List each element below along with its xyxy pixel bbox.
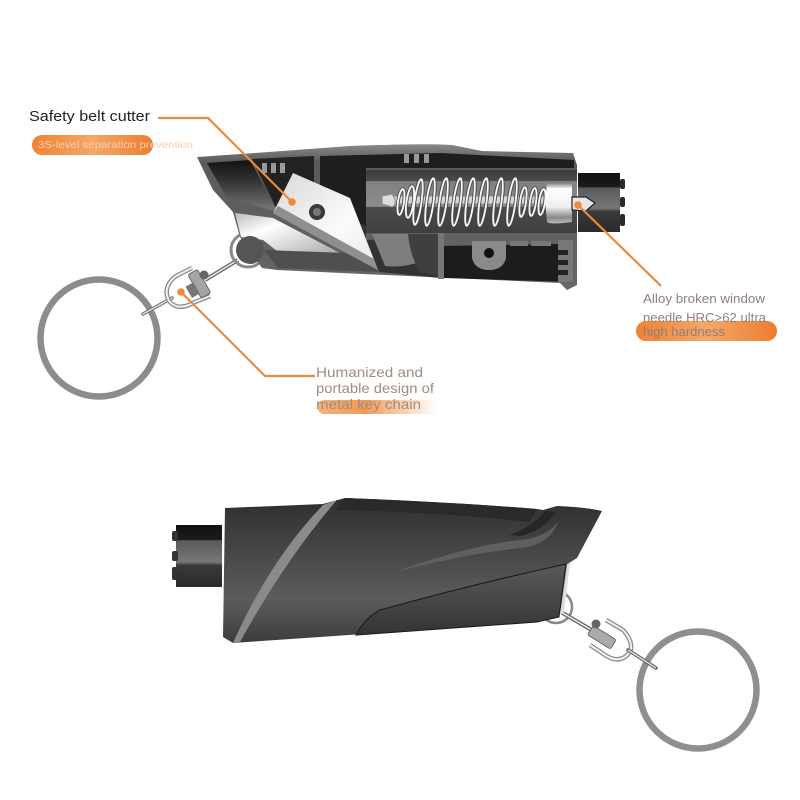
key chain caption: metal key chain <box>316 396 421 412</box>
leader line: window needle <box>574 201 661 286</box>
spring and striker pin <box>382 178 560 226</box>
chrome collar <box>545 183 572 224</box>
top sheen <box>336 498 537 522</box>
orange pill: separation prevention <box>32 135 193 155</box>
top device: cutaway view <box>40 144 625 396</box>
needle caption: needle HRC>62 ultra <box>643 311 766 325</box>
key chain caption: Humanized and <box>316 364 423 380</box>
key chain swivel link <box>143 260 238 314</box>
orange pill: separation prevention: 3S-level separation prevention <box>38 139 193 151</box>
side crease highlight <box>395 522 558 572</box>
swirl dark band <box>408 234 438 276</box>
lower panel <box>356 564 566 635</box>
highlight stripe <box>233 500 337 643</box>
text block: window needle <box>636 292 777 341</box>
title label: safety belt cutter: Safety belt cutter <box>29 108 150 125</box>
needle caption: high hardness <box>643 325 725 339</box>
leader line: belt cutter <box>158 118 296 206</box>
body silhouette <box>223 498 602 643</box>
title label: safety belt cutter <box>29 108 193 155</box>
upper interior panel <box>252 156 314 215</box>
vents <box>262 154 429 173</box>
key chain swivel link <box>561 612 656 668</box>
front wedge cavity <box>207 160 278 212</box>
grey ribs and wall <box>438 233 573 282</box>
rear edge highlight <box>560 563 570 615</box>
dark crease <box>510 511 556 536</box>
key ring <box>640 632 756 748</box>
spring coil highlight <box>396 178 547 226</box>
key chain caption: portable design of <box>316 380 434 396</box>
needle caption: Alloy broken window <box>643 292 766 306</box>
rib slots <box>558 250 568 275</box>
white lower wedge <box>235 213 340 253</box>
pivot cap <box>236 236 264 264</box>
grey swirl <box>372 234 420 266</box>
bottom device: closed view <box>172 498 756 748</box>
spring coil shadow <box>396 178 547 226</box>
lower dark rail <box>264 250 378 272</box>
orange fade bar <box>318 400 436 414</box>
breaker cap <box>176 525 222 587</box>
text block: key chain <box>316 364 436 414</box>
outer shell <box>197 144 577 290</box>
spring tube <box>366 170 577 233</box>
mounting tab <box>472 241 506 270</box>
cavity behind blade <box>320 215 440 278</box>
key ring <box>40 280 158 396</box>
cap studs <box>172 531 178 580</box>
connecting ring <box>540 591 572 623</box>
small connecting ring <box>231 233 265 267</box>
needle tip <box>572 197 595 211</box>
breaker cap <box>578 173 625 232</box>
upper interior panel right <box>320 153 574 240</box>
cutter blade <box>273 173 378 270</box>
orange pill <box>636 321 777 341</box>
leader line: key chain <box>177 288 315 376</box>
lower right interior <box>444 244 572 282</box>
